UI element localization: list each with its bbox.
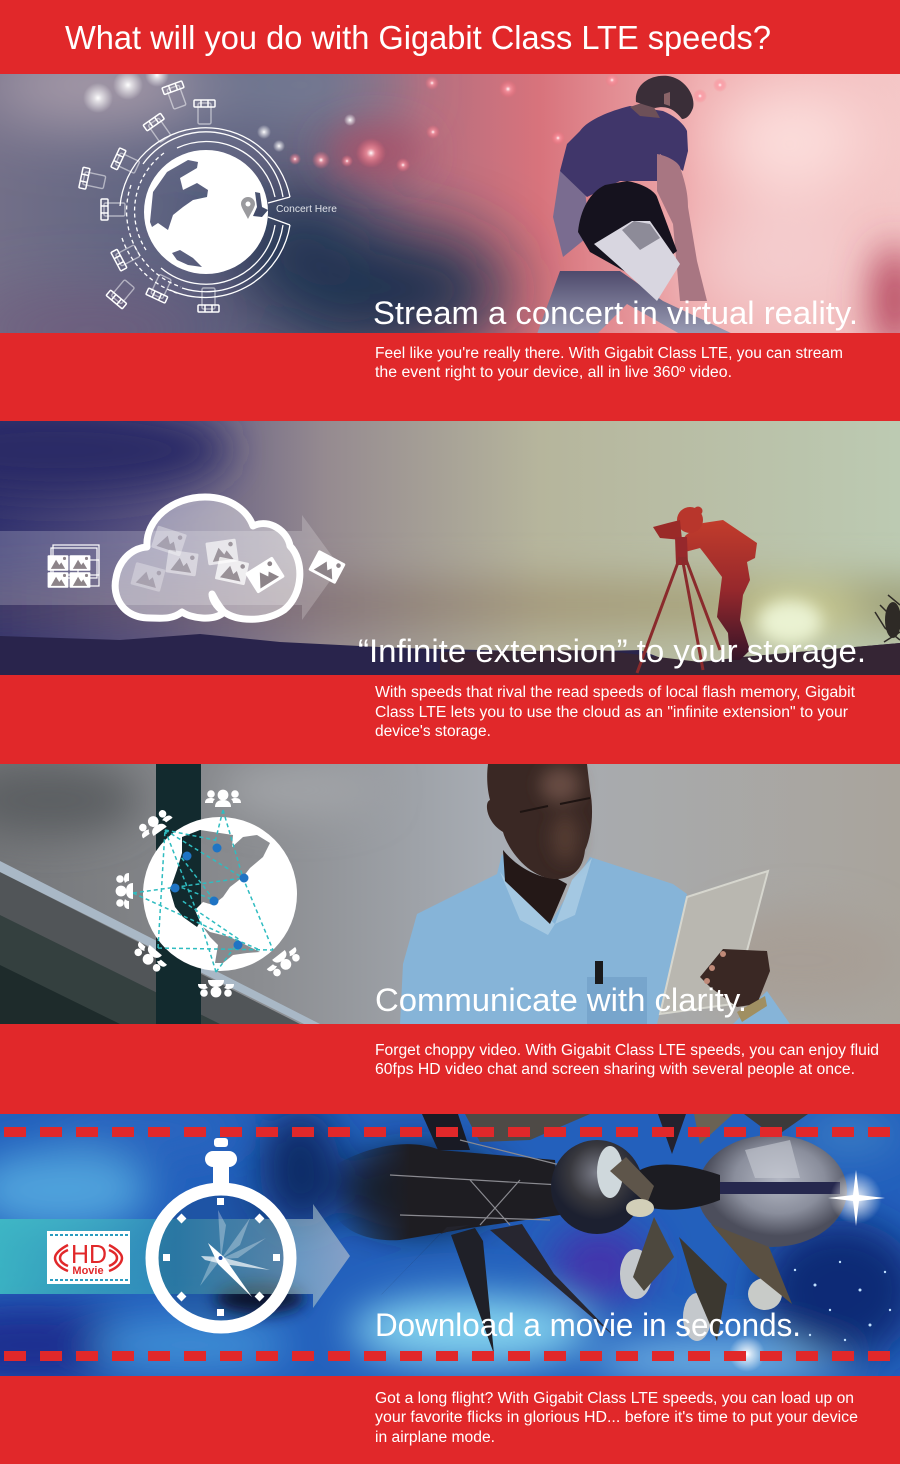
neck <box>503 850 567 924</box>
spheres <box>551 1140 643 1234</box>
star <box>830 1172 882 1224</box>
icon: globe <box>143 817 297 971</box>
jeans <box>537 271 733 334</box>
lower dishes <box>620 1249 652 1299</box>
arrow <box>0 1204 350 1308</box>
icon: photo stack <box>48 545 99 588</box>
heading: communicate: Communicate with clarity. <box>375 982 747 1018</box>
photographer silhouette <box>637 506 757 673</box>
text block: communicate: 60fps HD video chat and screen sharing with several people at once. <box>375 1061 855 1078</box>
film strip dashes <box>4 1132 892 1356</box>
text block: communicate: Forget choppy video. With Gigabit Class LTE speeds, you can enjoy fluid <box>375 1042 879 1059</box>
text block: download a movie: in airplane mode. <box>375 1429 495 1446</box>
pickguard <box>594 221 680 301</box>
panel: download a movie photo <box>0 1105 900 1385</box>
tee <box>560 106 688 197</box>
icon: people groups <box>116 790 303 997</box>
shirt <box>400 854 687 1024</box>
icon: devices ring <box>79 81 219 312</box>
icon: HD movie <box>47 1231 130 1284</box>
text block: stream a concert: Feel like you're really there. With Gigabit Class LTE, you can stream <box>375 345 843 362</box>
tablet <box>660 871 768 1014</box>
title: What will you do with Gigabit Class LTE speeds? <box>65 20 771 57</box>
text block: infinite storage: With speeds that rival the read speeds of local flash memory, Gigabit <box>375 684 856 701</box>
text block: communicate <box>375 1042 879 1078</box>
text block: infinite storage <box>375 684 856 740</box>
text block: download a movie <box>375 1390 858 1446</box>
icon: HD movie: Movie <box>72 1265 104 1277</box>
concert label: Concert Here <box>276 204 337 215</box>
lower petals <box>633 1217 674 1291</box>
icon: globe with streaming devices <box>79 81 337 312</box>
guitar body <box>578 181 677 280</box>
star field <box>794 1261 891 1341</box>
man with tablet photo <box>400 764 790 1024</box>
link network <box>133 810 273 972</box>
pole <box>156 764 201 1024</box>
icon: stopwatch <box>152 1138 290 1327</box>
icon: globe with video chat links <box>116 790 303 997</box>
text block: infinite storage: Class LTE lets you to use the cloud as an "infinite extension" to your <box>375 704 848 721</box>
tree <box>875 595 900 642</box>
stage lights <box>84 74 726 172</box>
text block: download a movie: Got a long flight? With Gigabit Class LTE speeds, you can load up on <box>375 1390 854 1407</box>
text block: download a movie: your favorite flicks in glorious HD... before it's time to put your device <box>375 1409 858 1426</box>
link nodes <box>170 844 248 950</box>
railing <box>0 872 300 1024</box>
spaceship photo <box>335 1114 885 1354</box>
left arm <box>553 171 590 257</box>
icon: globe <box>144 150 268 274</box>
hand <box>700 949 770 1007</box>
heading: stream a concert: Stream a concert in virtual reality. <box>373 295 858 331</box>
heading: infinite storage: “Infinite extension” to your storage. <box>358 633 866 669</box>
icon: cloud <box>115 497 300 619</box>
head <box>487 764 592 879</box>
icon: photo leaving cloud <box>308 550 346 584</box>
head <box>630 104 660 118</box>
panel: infinite storage photo <box>0 405 900 675</box>
text block: stream a concert: the event right to your device, all in live 360º video. <box>375 364 732 381</box>
panel: communicate with clarity photo <box>0 764 900 1024</box>
arrow <box>0 515 340 620</box>
text block: stream a concert <box>375 345 843 381</box>
panel: stream a concert photo <box>0 74 900 333</box>
icon: concentric signal rings <box>120 128 290 297</box>
right arm <box>657 154 707 301</box>
icon: HD movie: HD <box>71 1239 107 1269</box>
heading: download a movie: Download a movie in seconds. <box>375 1307 801 1343</box>
text block: infinite storage: device's storage. <box>375 723 491 740</box>
guitarist photo <box>537 76 733 334</box>
